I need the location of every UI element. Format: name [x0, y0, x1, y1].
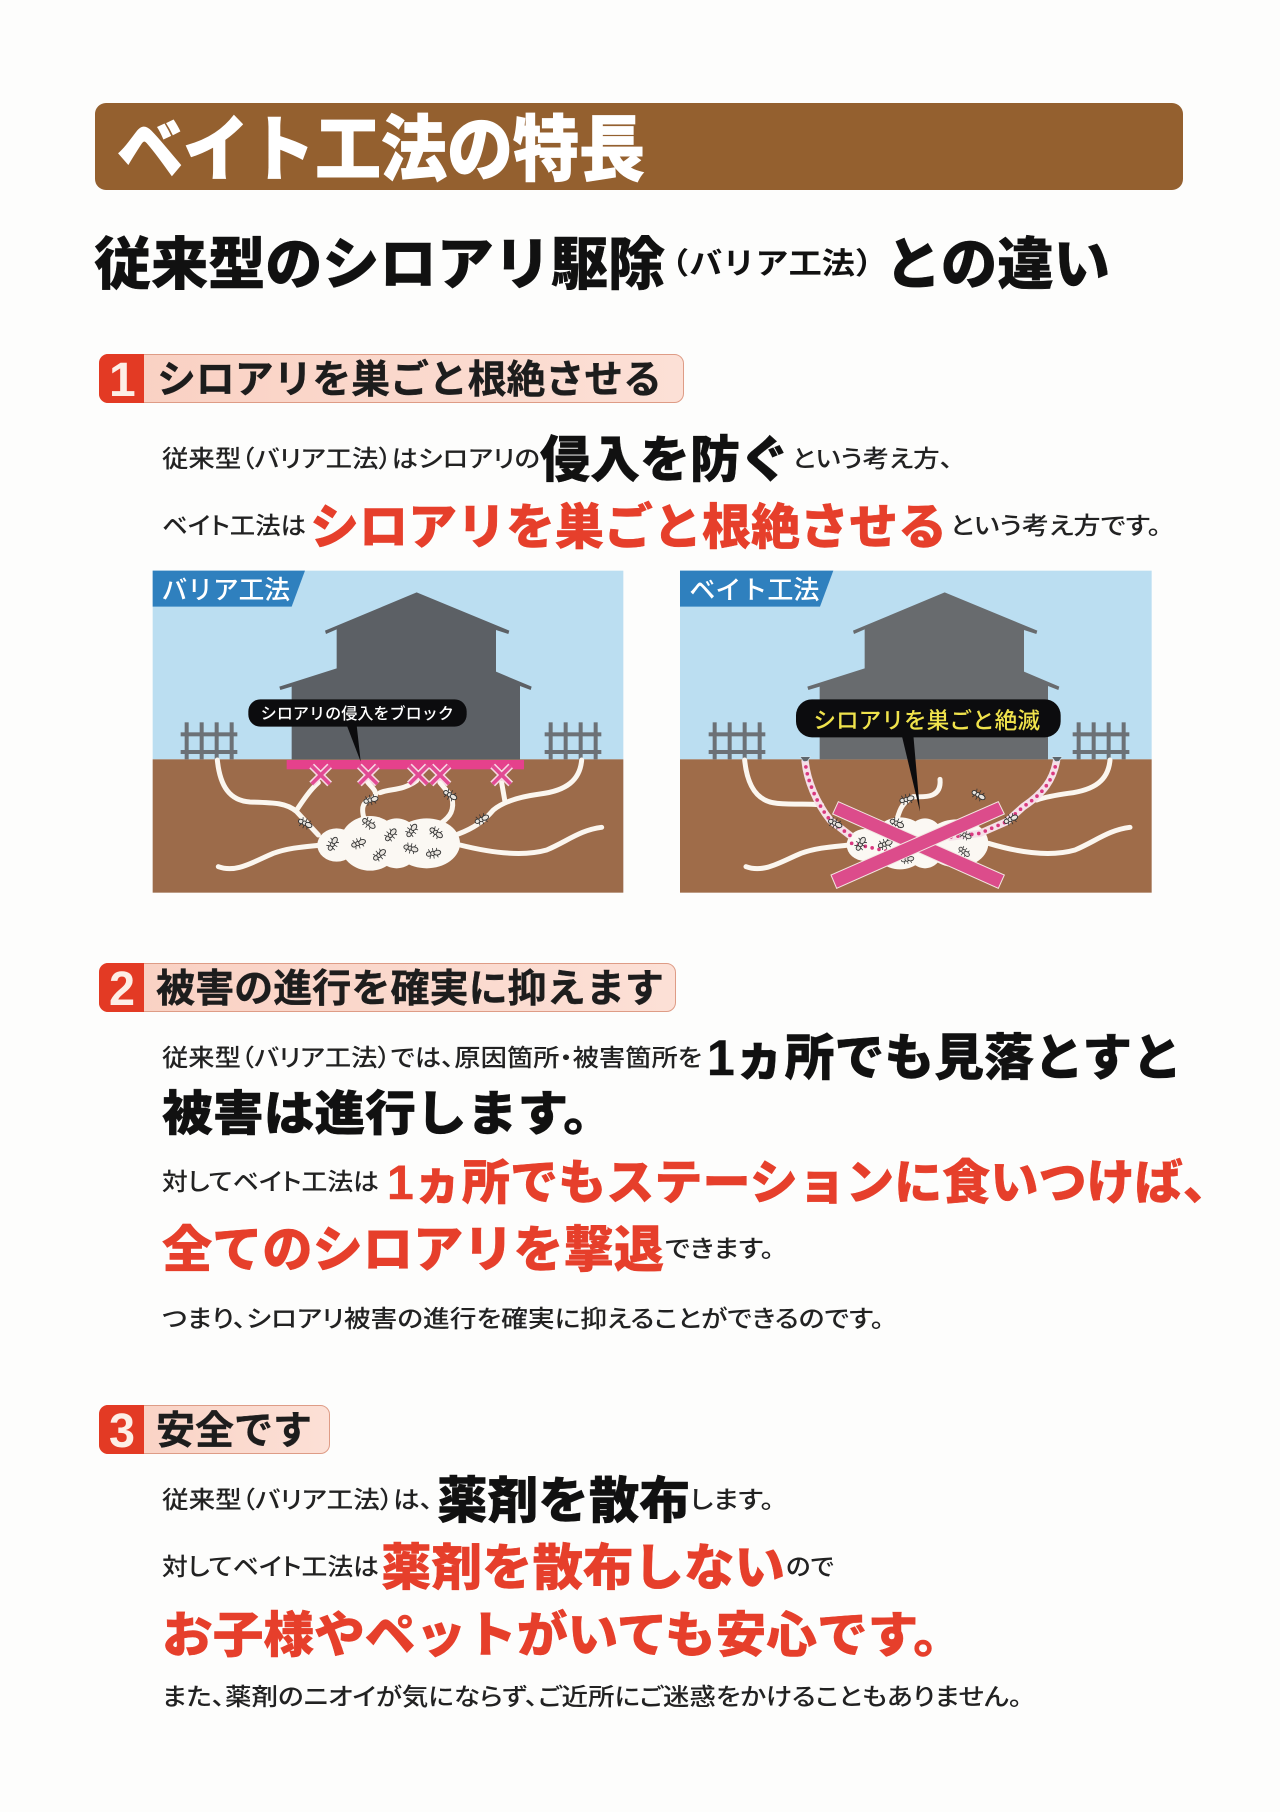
- section 3 text: また、薬剤のニオイが気にならず、ご近所にご迷惑をかけることもありません。: [162, 1684, 1022, 1711]
- subtitle: （バリア工法）: [656, 248, 888, 281]
- section 2 text: 全てのシロアリを撃退: [162, 1222, 664, 1278]
- diagram: barrier method: [153, 571, 623, 893]
- section 2 text: つまり、シロアリ被害の進行を確実に抑えることができるのです。: [162, 1306, 884, 1333]
- section 1 heading: シロアリを巣ごと根絶させる: [157, 359, 662, 402]
- termites: [296, 787, 491, 864]
- section 1 text: という考え方、: [792, 446, 953, 473]
- section 2 text: 従来型（バリア工法）では、原因箇所・被害箇所を: [162, 1045, 702, 1072]
- section 1 text: [162, 432, 1161, 555]
- callout: シロアリを巣ごと絶滅: [813, 707, 1040, 733]
- label: barrier method: バリア工法: [162, 575, 290, 605]
- termite tunnels: [745, 760, 1130, 869]
- termite tunnels: [217, 760, 602, 869]
- section 2 heading: 被害の進行を確実に抑えます: [156, 968, 664, 1011]
- fences: [709, 722, 1129, 759]
- section 1 text: 従来型（バリア工法）はシロアリの: [162, 446, 540, 473]
- section 2 text: 対してベイト工法は: [162, 1169, 379, 1196]
- label: bait method: ベイト工法: [689, 575, 819, 605]
- section 3 text: 対してベイト工法は: [162, 1554, 379, 1581]
- section 3 heading: 安全です: [156, 1410, 312, 1453]
- bait stations and dotted bait path: [800, 757, 1062, 853]
- section 2 text: 被害は進行します。: [162, 1088, 614, 1141]
- section 3 text: します。: [690, 1487, 774, 1514]
- section 2 text: 1ヵ所でも見落とすと: [707, 1030, 1182, 1086]
- callout: シロアリの侵入をブロック: [261, 704, 454, 723]
- callout: [796, 699, 1061, 812]
- subtitle: 従来型のシロアリ駆除: [94, 233, 665, 297]
- diagram: bait method: [680, 571, 1152, 893]
- section 1 text: シロアリを巣ごと根絶させる: [310, 500, 947, 555]
- section 3 text: ので: [786, 1554, 834, 1581]
- section 2 heading: 2: [109, 963, 135, 1016]
- section 1 heading: 1: [109, 354, 136, 407]
- title banner: ベイト工法の特長: [117, 111, 645, 191]
- fences: [181, 722, 601, 759]
- section 3 heading: 3: [109, 1405, 135, 1458]
- section 3 heading: [99, 1405, 330, 1458]
- section 2 text: できます。: [665, 1236, 774, 1263]
- section 3 text: [162, 1473, 1022, 1711]
- section 3 text: お子様やペットがいても安心です。: [162, 1608, 964, 1663]
- pink barrier: [287, 760, 524, 769]
- section 3 text: 薬剤を散布しない: [381, 1540, 785, 1596]
- section 3 text: 薬剤を散布: [437, 1473, 690, 1529]
- termites: [826, 787, 1020, 865]
- subtitle: との違い: [885, 233, 1110, 297]
- big pink cross: [831, 802, 1004, 888]
- section 1 text: という考え方です。: [950, 513, 1161, 540]
- section 2 text: 1ヵ所でもステーションに食いつけば、: [387, 1157, 1231, 1210]
- section 1 text: 侵入を防ぐ: [540, 432, 790, 488]
- callout: [248, 699, 467, 762]
- section 1 text: ベイト工法は: [162, 513, 306, 540]
- termite nest: [317, 816, 460, 871]
- termite nest: [847, 817, 988, 869]
- subtitle: [94, 233, 1110, 297]
- blocked crosses: [312, 766, 511, 784]
- house: [279, 592, 532, 759]
- title banner: [95, 103, 1183, 191]
- section 3 text: 従来型（バリア工法）は、: [162, 1487, 433, 1514]
- section 2 text: [162, 1030, 1231, 1333]
- house: [807, 592, 1059, 759]
